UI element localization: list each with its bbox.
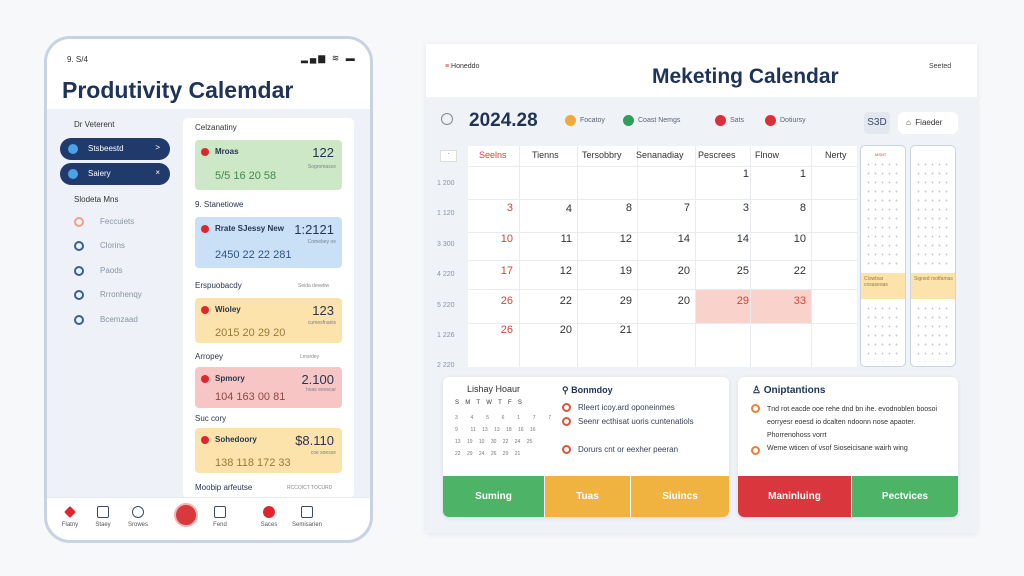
day numbers: 26: [501, 295, 513, 307]
text: 9. Stanetiowe: [195, 200, 243, 209]
card green: Sogromasce: [308, 164, 336, 170]
day numbers: 22: [794, 265, 806, 277]
text: 2024.28: [469, 110, 538, 131]
day numbers: 20: [678, 265, 690, 277]
bottom nav: Saces: [261, 522, 277, 528]
day numbers: 21: [620, 324, 632, 336]
day numbers: 29: [620, 295, 632, 307]
text: Signed rsotfamas: [914, 276, 953, 282]
bottom nav: Flatny: [62, 522, 78, 528]
panel: bottom left card: SMTWTFS: [455, 400, 528, 406]
row labels: [437, 180, 455, 369]
row labels: 1 200: [437, 180, 455, 187]
panel: bottom left card: [443, 377, 729, 517]
day numbers: 1: [743, 168, 749, 180]
day numbers: 8: [626, 202, 632, 214]
day numbers: 26: [501, 324, 513, 336]
heading: left column: Dr Veterent: [74, 120, 114, 129]
weekday headers: Pescrees: [698, 150, 736, 160]
phone header: [47, 39, 370, 109]
day numbers: 3: [507, 202, 513, 214]
list: bottom left: Dorurs cnt or eexher peeran: [578, 445, 678, 454]
text: Arropey: [195, 352, 223, 361]
weekday headers: Tersobbry: [582, 150, 622, 160]
list items: Rrronhenqy: [100, 290, 142, 299]
card yellow: [195, 298, 342, 343]
panel: marketing dashboard: [426, 44, 977, 533]
buttons: [443, 476, 544, 517]
bottom nav: Staey: [95, 522, 111, 528]
legend: [565, 115, 806, 126]
bottom nav: Semisarien: [292, 522, 322, 528]
row labels: 5 220: [437, 302, 455, 309]
panel: bottom right card: Pectvices: [882, 491, 928, 502]
title: Meketing Calendar: [652, 65, 839, 88]
card red: Spmory: [215, 374, 245, 383]
panel: schedule cards: Celzanatiny: [195, 123, 237, 132]
text: Erspuobacdy: [195, 281, 242, 290]
header: [426, 44, 977, 97]
header: Seeted: [929, 63, 951, 70]
day numbers: 29: [737, 295, 749, 307]
card blue: [195, 217, 342, 268]
text: Moobip arfeutse: [195, 483, 252, 492]
card yellow: 123: [312, 303, 334, 318]
text: S3D: [867, 117, 887, 128]
toolbar: [441, 113, 453, 125]
header: ≡ Honeddo: [445, 63, 479, 70]
panel: bottom right card: [738, 377, 958, 517]
card blue: Comebey oe: [308, 239, 336, 245]
card yellow: Wioley: [215, 305, 241, 314]
bottom nav: Fend: [213, 522, 227, 528]
pill 2: ×: [155, 168, 160, 177]
list items: Paods: [100, 266, 123, 275]
weekday headers: Seelns: [479, 150, 507, 160]
button: ⌂ Fiaeder: [906, 118, 942, 127]
pill 2: Saiery: [88, 169, 111, 178]
pill 1: Stsbeestd: [88, 144, 124, 153]
list: bottom left: ⚲ Bonmdoy: [562, 385, 613, 395]
day numbers: 7: [684, 202, 690, 214]
text: Seida devetiw: [298, 283, 329, 289]
card blue: 2450 22 22 281: [215, 249, 291, 261]
card red: hoas eeoscar: [306, 387, 336, 393]
text: Suc cory: [195, 414, 226, 423]
mini calendar: Lishay Hoaur: [467, 384, 520, 394]
day numbers: 4: [566, 203, 572, 215]
day numbers: 10: [501, 233, 513, 245]
list items: Bcemzaad: [100, 315, 138, 324]
legend: Sats: [730, 117, 744, 124]
card red: 2.100: [301, 372, 334, 387]
bottom nav: [47, 497, 370, 540]
row labels: 1 120: [437, 210, 455, 217]
pill 2: [60, 163, 170, 185]
day numbers: 12: [620, 233, 632, 245]
card yellow 2: Sohedoory: [215, 435, 257, 444]
calendar grid: [468, 146, 857, 367]
card yellow 2: [195, 428, 342, 473]
buttons: Suming: [475, 491, 512, 502]
side mini panels: MSNT: [875, 152, 886, 157]
card yellow 2: coe soesse: [311, 450, 336, 456]
day numbers: 20: [678, 295, 690, 307]
button: [898, 112, 958, 134]
legend: Focatoy: [580, 117, 605, 124]
weekday headers: Nerty: [825, 150, 847, 160]
day numbers: 33: [794, 295, 806, 307]
panel: bottom left card: Siuincs: [662, 491, 698, 502]
card green: 5/5 16 20 58: [215, 170, 276, 182]
day numbers: 14: [678, 233, 690, 245]
day numbers: 19: [620, 265, 632, 277]
side mini panels: Clowtsar cnsaseoas: [864, 276, 888, 288]
pill 1: [60, 138, 170, 160]
row labels: 1 226: [437, 332, 455, 339]
panel: bottom right card: Tnd rot eacde ooe rehe dnd bn ihe. evodnoblen boosoi eorryesr eoesd io dcalten ndoonn nose apaoter. Phorrenohoss vorrt: [767, 406, 937, 439]
list items: [74, 217, 142, 325]
list: bottom left: Seenr ecthisat uoris cuntenatiols: [578, 417, 694, 426]
day numbers: 10: [794, 233, 806, 245]
pill 1: >: [155, 143, 160, 152]
heading: list: Slodeta Mns: [74, 195, 118, 204]
card blue: 1:2121: [294, 222, 334, 237]
bottom nav: Srowes: [128, 522, 148, 528]
panel: bottom right card: Maninluing: [768, 491, 821, 502]
card blue: Rrate SJessy New: [215, 224, 284, 233]
list: bottom left: Rleert icoy.ard oponeinmes: [578, 403, 675, 412]
card yellow: cumesfnanis: [308, 320, 336, 326]
panel: bottom left card: 3 4 5 6 1 7 7 9 11 13 13 18 16 16 13 19 10 30 22 24 25 22 29 24 26 29 21: [455, 415, 551, 457]
panel: bottom right card: ♙ Oniptantions: [752, 385, 825, 396]
text: Lmsrdey: [300, 354, 319, 360]
day numbers: 12: [560, 265, 572, 277]
weekday headers: Senanadiay: [636, 150, 684, 160]
row labels: 3 300: [437, 241, 455, 248]
card yellow: 2015 20 29 20: [215, 327, 285, 339]
panel: schedule cards: [183, 118, 354, 498]
row labels: 4 220: [437, 271, 455, 278]
row labels: 2 220: [437, 362, 455, 369]
panel: phone: [44, 36, 373, 543]
weekday headers: Flnow: [755, 150, 779, 160]
card green: [195, 140, 342, 190]
text: ·: [448, 151, 450, 157]
card red: 104 163 00 81: [215, 391, 285, 403]
side mini panels: [860, 145, 906, 367]
title: Produtivity Calemdar: [62, 77, 293, 103]
day numbers: 11: [561, 233, 572, 245]
card green: 122: [312, 145, 334, 160]
panel: bottom right card: Weme wticen of vsof Sioseicisane wairh wing: [767, 445, 908, 452]
status bar: 9. S/4: [67, 55, 88, 64]
day numbers: 25: [737, 265, 749, 277]
panel: bottom left card: Tuas: [576, 491, 599, 502]
day numbers: 14: [737, 233, 749, 245]
legend: Dotiursy: [780, 117, 806, 124]
day numbers: 20: [560, 324, 572, 336]
day numbers: 22: [560, 295, 572, 307]
day numbers: 17: [501, 265, 513, 277]
card red: [195, 367, 342, 408]
day numbers: 3: [743, 202, 749, 214]
day numbers: 8: [800, 202, 806, 214]
text: RCCOICT TOCURD: [287, 485, 332, 491]
list items: Clorins: [100, 241, 125, 250]
weekday headers: Tienns: [532, 150, 559, 160]
list: bottom left: [562, 385, 694, 454]
card yellow 2: $8.110: [295, 433, 334, 448]
list items: Feccuiets: [100, 217, 134, 226]
icon: center button: [174, 503, 198, 527]
weekday headers: [479, 150, 847, 160]
card yellow 2: 138 118 172 33: [215, 457, 291, 469]
day numbers: [501, 168, 806, 336]
card green: Mroas: [215, 147, 239, 156]
icon: status: ▂▄▆ ≋ ▬: [301, 53, 357, 63]
legend: Coast Nemgs: [638, 117, 680, 124]
day numbers: 1: [800, 168, 806, 180]
